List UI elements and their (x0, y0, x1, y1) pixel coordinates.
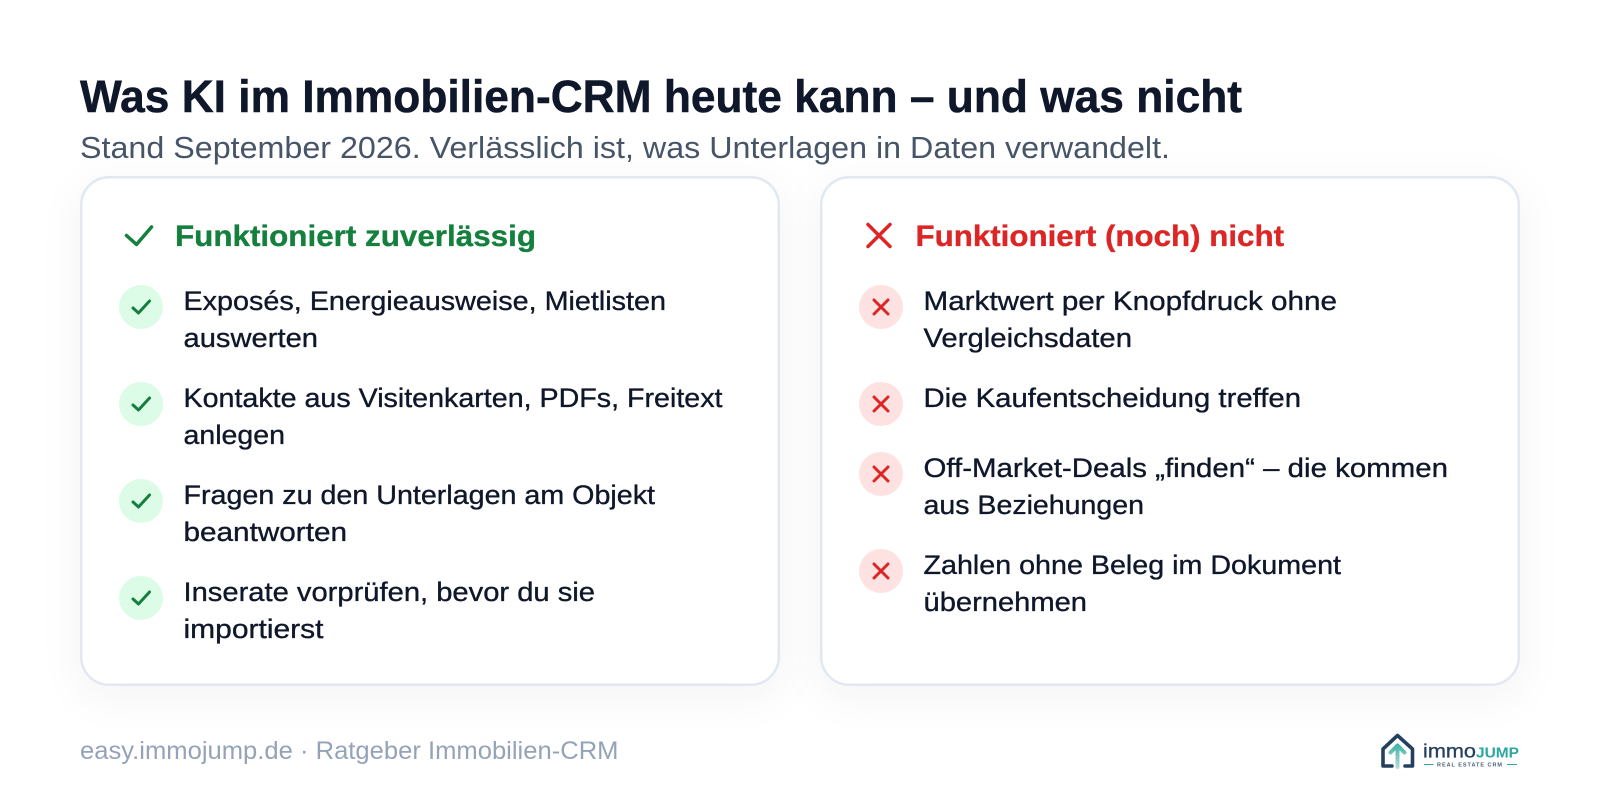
panel: funktioniert zuverlässig (81, 177, 779, 685)
title: Was KI im Immobilien-CRM heute kann – und was nicht (80, 71, 1242, 122)
panel: funktioniert noch nicht (821, 177, 1519, 685)
heading: funktioniert zuverlässig: Funktioniert zuverlässig (175, 220, 536, 253)
item: Kontakte: anlegen (184, 420, 285, 450)
item: Fragen: Fragen zu den Unterlagen am Objekt (184, 480, 656, 510)
item: Marktwert: Vergleichsdaten (924, 323, 1132, 353)
item: Kaufentscheidung (859, 382, 1301, 426)
item: Fragen (119, 479, 656, 547)
item: Inserate: Inserate vorprüfen, bevor du sie (184, 577, 595, 607)
item: Inserate (119, 576, 595, 644)
icon: heading check (126, 227, 152, 244)
item: Marktwert (859, 285, 1337, 353)
item: Inserate: importierst (184, 614, 324, 644)
item: Exposés: Exposés, Energieausweise, Mietlisten (184, 286, 666, 316)
item: Off-Market: Off-Market-Deals „finden“ – die kommen (924, 453, 1448, 483)
item: Exposés: auswerten (184, 323, 318, 353)
logo wordmark: immo (1423, 742, 1476, 763)
heading: funktioniert noch nicht: Funktioniert (noch) nicht (916, 220, 1284, 253)
item: Zahlen: Zahlen ohne Beleg im Dokument (924, 550, 1342, 580)
item: Off-Market (859, 452, 1448, 520)
item: Zahlen: übernehmen (924, 587, 1087, 617)
logo: immoJUMP (1383, 736, 1519, 768)
item: Kontakte: Kontakte aus Visitenkarten, PDFs, Freitext (184, 383, 723, 413)
item: Off-Market: aus Beziehungen (924, 490, 1144, 520)
item: Zahlen (859, 549, 1342, 617)
footer source: easy.immojump.de · Ratgeber Immobilien-CRM (80, 737, 618, 765)
item: Marktwert: Marktwert per Knopfdruck ohne (924, 286, 1337, 316)
icon: heading cross (868, 224, 890, 246)
panel background left (81, 177, 779, 685)
item: Fragen: beantworten (184, 517, 347, 547)
item: Exposés (119, 285, 666, 353)
item: Kontakte (119, 382, 723, 450)
item: Kaufentscheidung: Die Kaufentscheidung treffen (924, 383, 1301, 413)
logo tagline: REAL ESTATE CRM (1437, 762, 1502, 768)
logo: immoJUMP: JUMP (1476, 746, 1519, 762)
panel background right (821, 177, 1519, 685)
subtitle: Stand September 2026. Verlässlich ist, was Unterlagen in Daten verwandelt. (80, 130, 1170, 165)
icon: house with arrow (1383, 736, 1412, 767)
